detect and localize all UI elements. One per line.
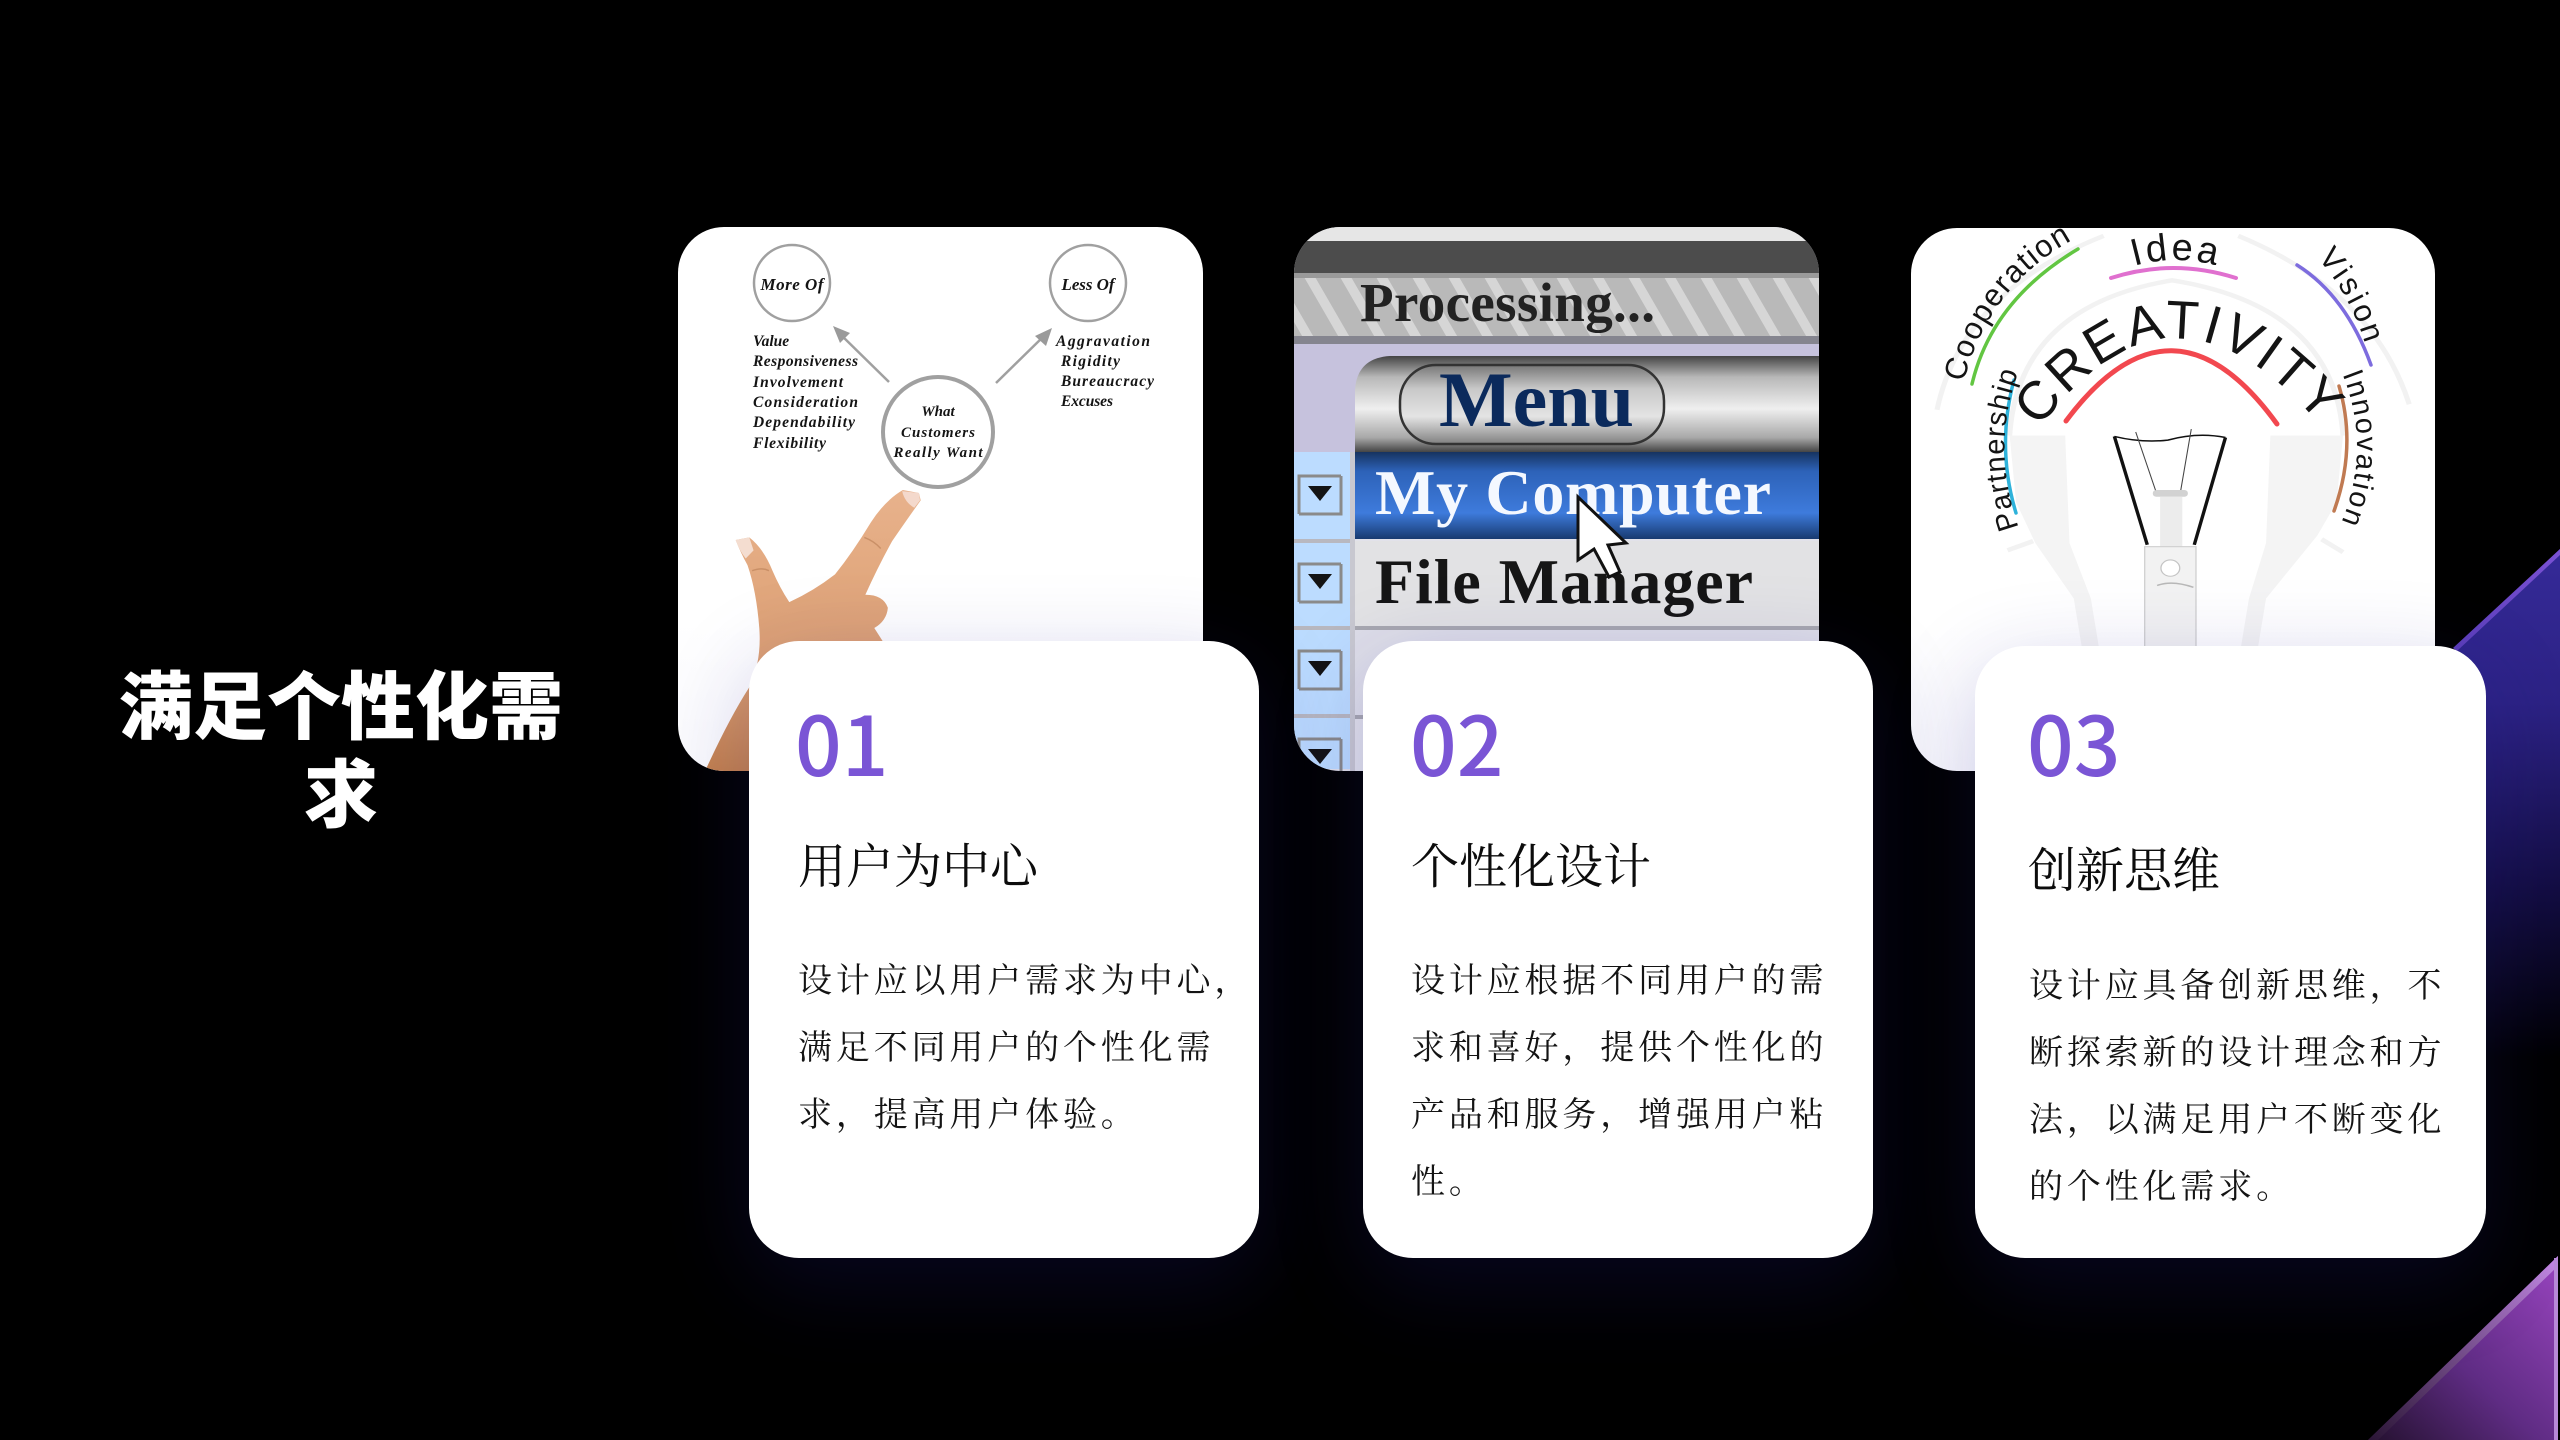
body text: 法，以满足用户不断变化 xyxy=(2029,1092,2445,1141)
heading: 用户为中心 xyxy=(798,828,1038,897)
diagram labels: Value xyxy=(753,333,789,350)
body text: 的个性化需求。 xyxy=(2029,1159,2294,1208)
number 02: 02 xyxy=(1410,681,1503,800)
title xyxy=(119,666,563,837)
body text: 设计应根据不同用户的需 xyxy=(1411,953,1827,1002)
image panel: software menu screenshot: File Manager xyxy=(1375,546,1753,617)
panel: card 03 xyxy=(1975,646,2486,1258)
curved words: Vision xyxy=(2323,244,2379,342)
curved words: Innovation xyxy=(2342,370,2374,524)
heading: 个性化设计 xyxy=(1411,828,1651,897)
body text: 性。 xyxy=(1411,1154,1487,1203)
heading: 创新思维 xyxy=(2028,832,2220,901)
curved words xyxy=(1946,228,2379,532)
diagram labels: Bureaucracy xyxy=(1060,373,1154,390)
diagram labels: Responsiveness xyxy=(752,353,858,370)
row: My Computer xyxy=(1355,452,1819,539)
panel: card 02 xyxy=(1363,641,1873,1258)
left column with dropdown arrows xyxy=(1294,452,1355,777)
bulb filament xyxy=(2114,429,2225,545)
diagram labels: More Of xyxy=(760,275,826,294)
title: 求 xyxy=(304,754,378,837)
diagram labels: Aggravation xyxy=(1055,333,1150,350)
curved words: Idea xyxy=(2131,232,2216,265)
diagram labels: What xyxy=(921,404,956,420)
icon: pointing hand xyxy=(703,490,921,776)
image panel: software menu screenshot xyxy=(1294,227,1819,771)
body text: 满足不同用户的个性化需 xyxy=(798,1020,1214,1069)
title: 满足个性化需 xyxy=(119,666,563,749)
row: File Manager xyxy=(1355,541,1819,626)
diagram labels: Customers xyxy=(901,425,975,441)
curved words: Cooperation xyxy=(1946,228,2070,378)
body text xyxy=(1411,953,1827,1203)
icon: mouse cursor xyxy=(1578,497,1626,577)
body text: 设计应具备创新思维，不 xyxy=(2029,958,2445,1007)
diagram labels: Excuses xyxy=(1060,393,1113,410)
menu tab xyxy=(1355,356,1819,452)
bulb glass xyxy=(1937,236,2409,650)
curved words: CREATIVITY xyxy=(2018,300,2346,419)
diagram labels: Less Of xyxy=(1060,275,1117,294)
diagram labels: Rigidity xyxy=(1060,353,1120,370)
number 01: 01 xyxy=(795,681,888,800)
body text: 设计应以用户需求为中心， xyxy=(798,953,1252,1002)
diagram labels: Dependability xyxy=(752,414,855,431)
diagram labels: Involvement xyxy=(752,374,844,391)
top right purple panel xyxy=(2300,549,2560,1060)
body text xyxy=(798,953,1252,1136)
bottom right purple triangle xyxy=(2368,1256,2558,1440)
number 03: 03 xyxy=(2027,681,2120,800)
image panel: software menu screenshot: My Computer xyxy=(1375,457,1771,528)
curved words: Partnership xyxy=(1987,370,2020,532)
image panel: software menu screenshot: Menu xyxy=(1439,356,1634,443)
diagram labels xyxy=(752,275,1154,461)
image panel: customer needs diagram with pointing hand xyxy=(678,227,1203,771)
processing label: Processing... xyxy=(1360,272,1655,333)
body text: 求和喜好，提供个性化的 xyxy=(1411,1020,1827,1069)
diagram labels: Really Want xyxy=(892,445,983,461)
diagram: circles and arrows xyxy=(754,245,1126,487)
image panel: creativity light bulb xyxy=(1911,228,2435,771)
body text xyxy=(2029,958,2445,1208)
body text: 断探索新的设计理念和方 xyxy=(2029,1025,2445,1074)
diagram labels: Flexibility xyxy=(752,435,826,452)
body text: 求，提高用户体验。 xyxy=(798,1087,1139,1136)
panel: card 01 xyxy=(749,641,1259,1258)
coloured arcs xyxy=(1972,249,2371,513)
body text: 产品和服务，增强用户粘 xyxy=(1411,1087,1827,1136)
diagram labels: Consideration xyxy=(753,394,858,411)
